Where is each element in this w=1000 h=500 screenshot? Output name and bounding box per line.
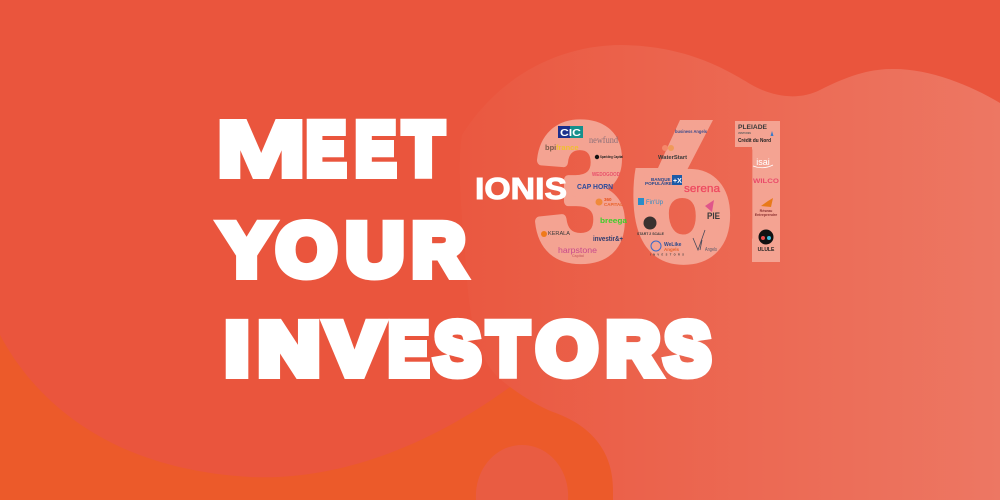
logo: bpifrance: france	[556, 143, 579, 152]
logo: serena: serena	[684, 183, 721, 195]
logo: PIE: PIE	[707, 211, 720, 221]
logo: WeLike Angels: Angels	[664, 247, 680, 252]
logo: VA Angels: Angels	[705, 247, 717, 253]
logo: Banque Populaire: BANQUE	[651, 177, 671, 182]
title line: INVESTORS: S	[434, 308, 481, 391]
title line: MEET: E	[355, 109, 396, 191]
logo: Fin'Up: Fin'Up	[646, 199, 663, 206]
logo: Ulule: ULULE	[758, 247, 775, 253]
logo: Banque Populaire: +X	[673, 178, 682, 185]
title line: YOUR: R	[412, 208, 465, 292]
title line: INVESTORS: O	[537, 308, 597, 391]
logo: isai: isai	[756, 157, 770, 167]
investor logos on digit 6	[637, 129, 721, 256]
title line: INVESTORS: R	[606, 308, 660, 390]
title line: INVESTORS: T	[488, 307, 528, 390]
IONIS brand label: IONIS	[475, 171, 567, 206]
logo: Kerala: KERALA	[548, 231, 570, 237]
title line: MEET: E	[306, 108, 346, 191]
title line: YOUR: Y	[220, 210, 273, 292]
logo: 360 Capital	[596, 197, 623, 207]
logo: CAP HORN: CAP HORN	[577, 182, 613, 191]
logo: newfund: newfund	[589, 135, 618, 145]
title line: INVESTORS: I	[225, 308, 249, 390]
logo: Reseau Entreprendre: Réseau	[760, 209, 772, 213]
logo: Banque Populaire: POPULAIRE	[645, 181, 672, 186]
title line: YOUR: U	[346, 209, 404, 292]
digit 6: 6	[632, 87, 732, 299]
title line: MEET: M	[216, 105, 306, 194]
logo: Reseau Entreprendre: Entreprendre	[755, 213, 777, 217]
logo: Banque Populaire	[645, 175, 682, 186]
logo: Pleiade: VENTURES	[738, 131, 751, 135]
logo: pink mark: WEDOGOOD	[592, 172, 620, 178]
logo: black text mark: Sparkling Capital	[600, 155, 623, 159]
logo: Reseau Entreprendre	[755, 198, 777, 217]
logo: Wilco: WILCO	[753, 178, 779, 185]
logo: harpstone: harpstone	[558, 246, 598, 255]
logo: harpstone	[558, 246, 598, 258]
title line: INVESTORS: E	[388, 309, 429, 391]
logo: WeLike Angels	[650, 241, 684, 256]
logo: breega: breega	[600, 216, 628, 225]
title line: INVESTORS: S	[664, 308, 711, 391]
digit 1: 1	[707, 77, 821, 306]
logo: harpstone: Capital	[572, 254, 584, 258]
logo: 360 Capital: CAPITAL	[604, 202, 623, 207]
logo: Pleiade: PLEIADE	[738, 124, 768, 131]
logo: CIC: CIC	[560, 128, 581, 139]
investor logos on digit 1	[738, 124, 779, 253]
digit 1	[735, 121, 780, 262]
logo: WeLike Angels: INVESTORS	[650, 252, 684, 256]
logo: WaterStart: WaterStart	[658, 155, 687, 161]
orange blob bottom left	[0, 335, 613, 500]
title line: INVESTORS: V	[326, 307, 383, 390]
logo: WeLike Angels: WeLike	[664, 242, 682, 248]
digit 3: 3	[536, 85, 626, 298]
logo: bpifrance	[545, 143, 579, 152]
investor logos on digit 3	[541, 126, 628, 258]
logo: investir: investir&+	[593, 236, 623, 243]
title	[216, 105, 711, 391]
small circle bottom	[476, 445, 568, 500]
title line: YOUR: O	[277, 209, 336, 291]
title line: MEET: T	[404, 108, 443, 190]
logo: business angels: business Angels	[675, 129, 707, 134]
digit 6	[633, 120, 730, 265]
logo: Start 2 Scale: START 2 SCALE	[637, 232, 664, 236]
logo: Credit du Nord: Crédit du Nord	[738, 138, 771, 144]
title line: INVESTORS	[225, 307, 711, 391]
logo: bpifrance: bpi	[545, 143, 556, 152]
title line: YOUR	[220, 208, 465, 292]
title line: INVESTORS: N	[258, 308, 320, 390]
big number 361	[535, 119, 780, 265]
logo: 360 Capital: 360	[604, 197, 612, 202]
title line: MEET	[216, 105, 443, 194]
logo: Pleiade	[738, 124, 768, 135]
lighter wave shape	[460, 45, 1000, 500]
